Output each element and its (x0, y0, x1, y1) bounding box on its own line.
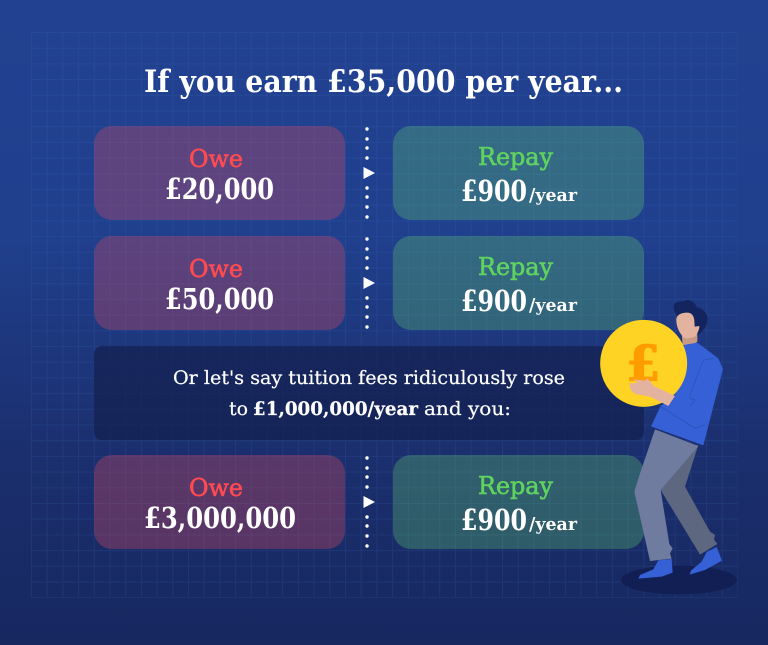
front leg (634, 429, 698, 561)
panel: owe £50,000 (94, 236, 345, 330)
panel: repay £900: Repay (478, 143, 553, 171)
panel: repay £900: /year (529, 514, 577, 535)
panel: owe £50,000: Owe (189, 255, 243, 283)
sweater (651, 343, 723, 445)
panel: repay £900 (393, 236, 644, 330)
panel: repay £900: /year (529, 295, 577, 316)
hair (674, 300, 708, 337)
panel: owe £3,000,000: £3,000,000 (144, 501, 296, 535)
panel: owe £20,000: Owe (189, 145, 243, 173)
panel: repay £900: /year (529, 185, 577, 206)
panel: owe £20,000 (94, 126, 345, 220)
panel: owe £3,000,000: Owe (189, 474, 243, 502)
panel: repay £900: £900 (461, 503, 527, 537)
panel: tuition fees scenario: to (229, 399, 248, 420)
arrow divider (364, 127, 375, 219)
panel: tuition fees scenario (94, 346, 644, 440)
arrow divider (364, 237, 375, 329)
panel: repay £900: Repay (478, 472, 553, 500)
panel: owe £3,000,000 (94, 455, 345, 549)
panel: repay £900: Repay (478, 253, 553, 281)
illustration: person carrying a pound coin (600, 300, 737, 594)
neck (682, 328, 697, 347)
pound symbol: £ (626, 336, 660, 393)
panel: repay £900: £900 (461, 284, 527, 318)
row 1: owe £20,000, repay £900 (94, 126, 644, 220)
hand and arm (629, 378, 675, 406)
panel: tuition fees scenario: Or let's say tuition fees ridiculously rose (173, 368, 565, 389)
panel: repay £900 (393, 455, 644, 549)
coin (600, 320, 687, 407)
back leg (661, 445, 717, 555)
panel: repay £900: £900 (461, 174, 527, 208)
panel: owe £50,000: £50,000 (165, 282, 274, 316)
panel: tuition fees scenario: and you: (424, 399, 511, 420)
shoes (638, 547, 722, 579)
panel: tuition fees scenario: £1,000,000/year (253, 399, 418, 420)
row 2: owe £50,000, repay £900 (94, 236, 644, 330)
title: If you earn £35,000 per year... (144, 64, 623, 100)
row 3: owe £3,000,000, repay £900 (94, 455, 644, 549)
arrow divider (364, 456, 375, 548)
shadow (621, 566, 737, 594)
panel: owe £20,000: £20,000 (165, 172, 274, 206)
panel: repay £900 (393, 126, 644, 220)
face (676, 313, 699, 338)
sweater folds (661, 358, 714, 428)
